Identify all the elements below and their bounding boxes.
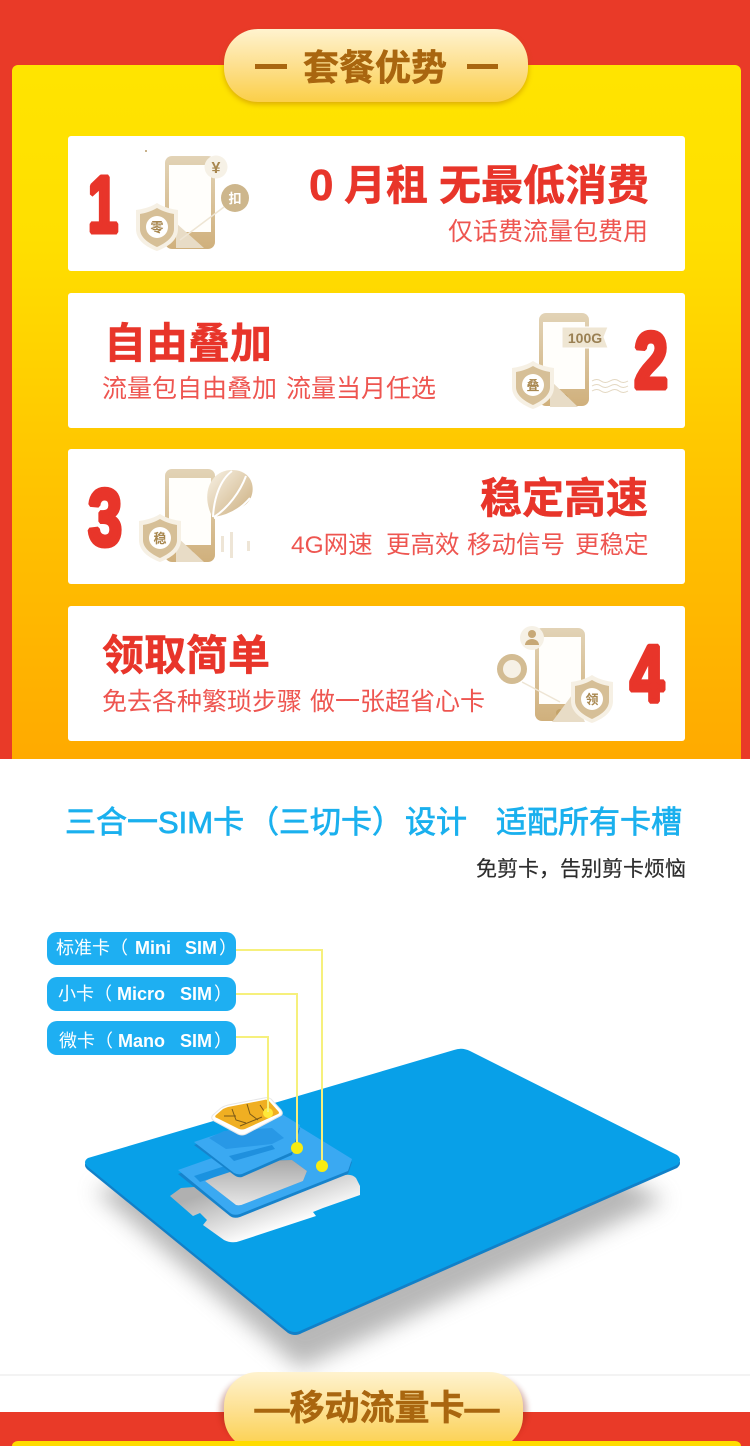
marker dots: [291, 1142, 303, 1154]
number 4: 4: [630, 630, 664, 719]
card cut-out: [170, 1175, 360, 1242]
label: standard SIM: [47, 932, 237, 965]
standard card tray: [178, 1127, 352, 1218]
label: standard SIM: Mini: [135, 938, 171, 958]
icon: phone with 100G tag: [512, 313, 628, 409]
label: micro SIM: SIM: [180, 984, 212, 1004]
heading: 月租: [344, 162, 428, 209]
card shadow: [95, 1100, 665, 1368]
icon: phone with contacts: 领: [585, 692, 599, 707]
label: nano SIM: ）: [214, 1031, 232, 1051]
panel: yellow advantages panel: [12, 65, 741, 759]
label: micro SIM: Micro: [117, 984, 165, 1004]
footer band: [0, 1374, 750, 1446]
icon: phone with 100G tag: 100G: [568, 330, 602, 346]
label: nano SIM: [47, 1021, 236, 1055]
label: micro SIM: [47, 977, 236, 1011]
heading pill: mobile data card: [220, 1372, 527, 1446]
label: standard SIM: SIM: [185, 938, 217, 958]
label: standard SIM: 标准卡（: [56, 938, 128, 958]
icon: phone with balloon: 稳: [153, 531, 167, 546]
card 1: zero monthly fee: [68, 136, 685, 271]
nano chip: [212, 1098, 282, 1135]
title: three-in-one SIM card: [65, 805, 682, 840]
heading: 稳定高速: [480, 475, 648, 522]
white SIM section background: [0, 759, 750, 1412]
label: nano SIM: SIM: [180, 1031, 212, 1051]
subheading: 流量包自由叠加: [102, 375, 277, 403]
icon: phone with contacts: [497, 626, 613, 723]
subheading: 仅话费流量包费用: [448, 218, 648, 246]
subheading: 流量当月任选: [286, 375, 436, 403]
subheading: 4G网速: [291, 531, 373, 559]
title: three-in-one SIM card: 设计: [405, 805, 467, 840]
heading: 0: [309, 161, 333, 210]
subheading: 更稳定: [575, 531, 648, 559]
number 2: 2: [634, 317, 668, 406]
icon: phone with shield: 零: [150, 220, 164, 235]
label: standard SIM: ）: [219, 938, 237, 958]
connector lines: [236, 950, 322, 1166]
heading: 领取简单: [102, 632, 270, 679]
heading pill: package advantages: 套餐优势: [303, 47, 447, 88]
number 1: 1: [88, 161, 118, 250]
number 3: 3: [88, 474, 122, 563]
heading pill: mobile data card: —移动流量卡—: [254, 1389, 500, 1428]
label: micro SIM: 小卡（: [58, 984, 112, 1004]
card 4: easy to claim: [68, 606, 685, 741]
subheading: 做一张超省心卡: [310, 688, 485, 716]
card 2: free stacking: [68, 293, 685, 428]
subheading: 免去各种繁琐步骤: [102, 688, 302, 716]
red header background: [0, 0, 750, 759]
title: three-in-one SIM card: 适配所有卡槽: [496, 805, 682, 840]
subheading: 移动信号: [467, 531, 565, 559]
subtitle: 免剪卡，告别剪卡烦恼: [476, 858, 686, 881]
label: micro SIM: ）: [214, 984, 232, 1004]
heading: 无最低消费: [439, 162, 649, 209]
icon: phone with shield: [136, 150, 249, 251]
subheading: 更高效: [386, 531, 460, 559]
icon: phone with shield: 扣: [228, 191, 242, 206]
next panel top edge: [12, 1441, 741, 1446]
icon: phone with 100G tag: 叠: [526, 378, 540, 393]
micro card piece: [194, 1113, 300, 1177]
label: nano SIM: Mano: [118, 1031, 165, 1051]
heading pill: package advantages: [224, 29, 528, 104]
title: three-in-one SIM card: （三切卡）: [248, 805, 403, 840]
icon: phone with balloon: [139, 469, 253, 562]
icon: phone with shield: ¥: [212, 160, 221, 177]
heading: 自由叠加: [104, 320, 272, 367]
diagram: SIM card illustration: [85, 950, 680, 1368]
title: three-in-one SIM card: 三合一SIM卡: [65, 805, 244, 840]
card 3: stable high speed: [68, 449, 685, 584]
main SIM card: [85, 1052, 680, 1335]
label: nano SIM: 微卡（: [59, 1031, 113, 1051]
